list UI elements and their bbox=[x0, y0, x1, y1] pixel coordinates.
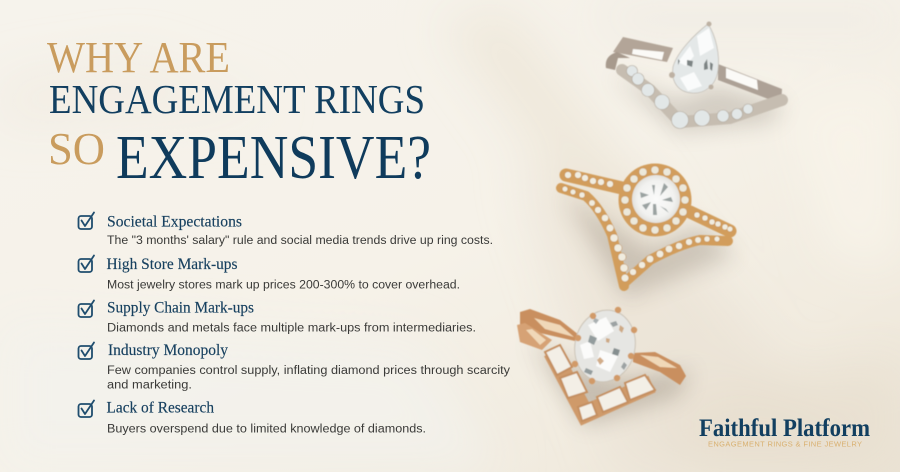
reason 5: lack of research bbox=[78, 400, 426, 436]
logo wordmark: Faithful Platform bbox=[699, 415, 870, 442]
reason 3: supply chain mark-ups bbox=[78, 300, 476, 334]
icon: checkbox bbox=[78, 212, 94, 229]
icon: checkbox bbox=[78, 342, 94, 359]
icon: checkbox bbox=[78, 300, 94, 317]
logo: Faithful Platform bbox=[699, 415, 870, 448]
title word: EXPENSIVE?: EXPENSIVE? bbox=[116, 124, 431, 192]
reason 4: industry monopoly bbox=[78, 342, 510, 392]
title line: ENGAGEMENT RINGS: ENGAGEMENT RINGS bbox=[49, 76, 425, 122]
reason 4: industry monopoly: and marketing. bbox=[107, 380, 192, 392]
reason 1: societal expectations: Societal Expectations bbox=[107, 214, 242, 230]
reason 3: supply chain mark-ups: Diamonds and metals face multiple mark-ups from intermediaries. bbox=[107, 322, 476, 334]
title bbox=[47, 33, 431, 192]
reason 4: industry monopoly: Industry Monopoly bbox=[108, 342, 228, 359]
ring: silver pear diamond bbox=[606, 22, 785, 132]
reason 5: lack of research: Buyers overspend due to limited knowledge of diamonds. bbox=[107, 424, 426, 436]
ring: rose gold oval with baguettes bbox=[517, 305, 690, 425]
reason list bbox=[78, 212, 510, 436]
icon: checkbox bbox=[78, 400, 94, 417]
reason 4: industry monopoly: Few companies control supply, inflating diamond prices through scarcity bbox=[107, 365, 510, 377]
ring: yellow gold halo bbox=[561, 164, 735, 298]
reason 2: high store mark-ups: Most jewelry stores mark up prices 200-300% to cover overhead. bbox=[107, 280, 460, 292]
reason 2: high store mark-ups: High Store Mark-ups bbox=[106, 256, 238, 273]
reason 3: supply chain mark-ups: Supply Chain Mark-ups bbox=[107, 300, 254, 316]
reason 2: high store mark-ups bbox=[78, 256, 460, 292]
logo tagline: ENGAGEMENT RINGS & FINE JEWELRY bbox=[708, 440, 862, 448]
reason 1: societal expectations bbox=[78, 212, 493, 247]
reason 1: societal expectations: The "3 months' salary" rule and social media trends drive up ring costs. bbox=[107, 235, 493, 247]
title line: WHY ARE: WHY ARE bbox=[47, 33, 230, 82]
reason 5: lack of research: Lack of Research bbox=[106, 400, 214, 416]
title word: SO: SO bbox=[48, 124, 105, 174]
icon: checkbox bbox=[78, 256, 94, 272]
